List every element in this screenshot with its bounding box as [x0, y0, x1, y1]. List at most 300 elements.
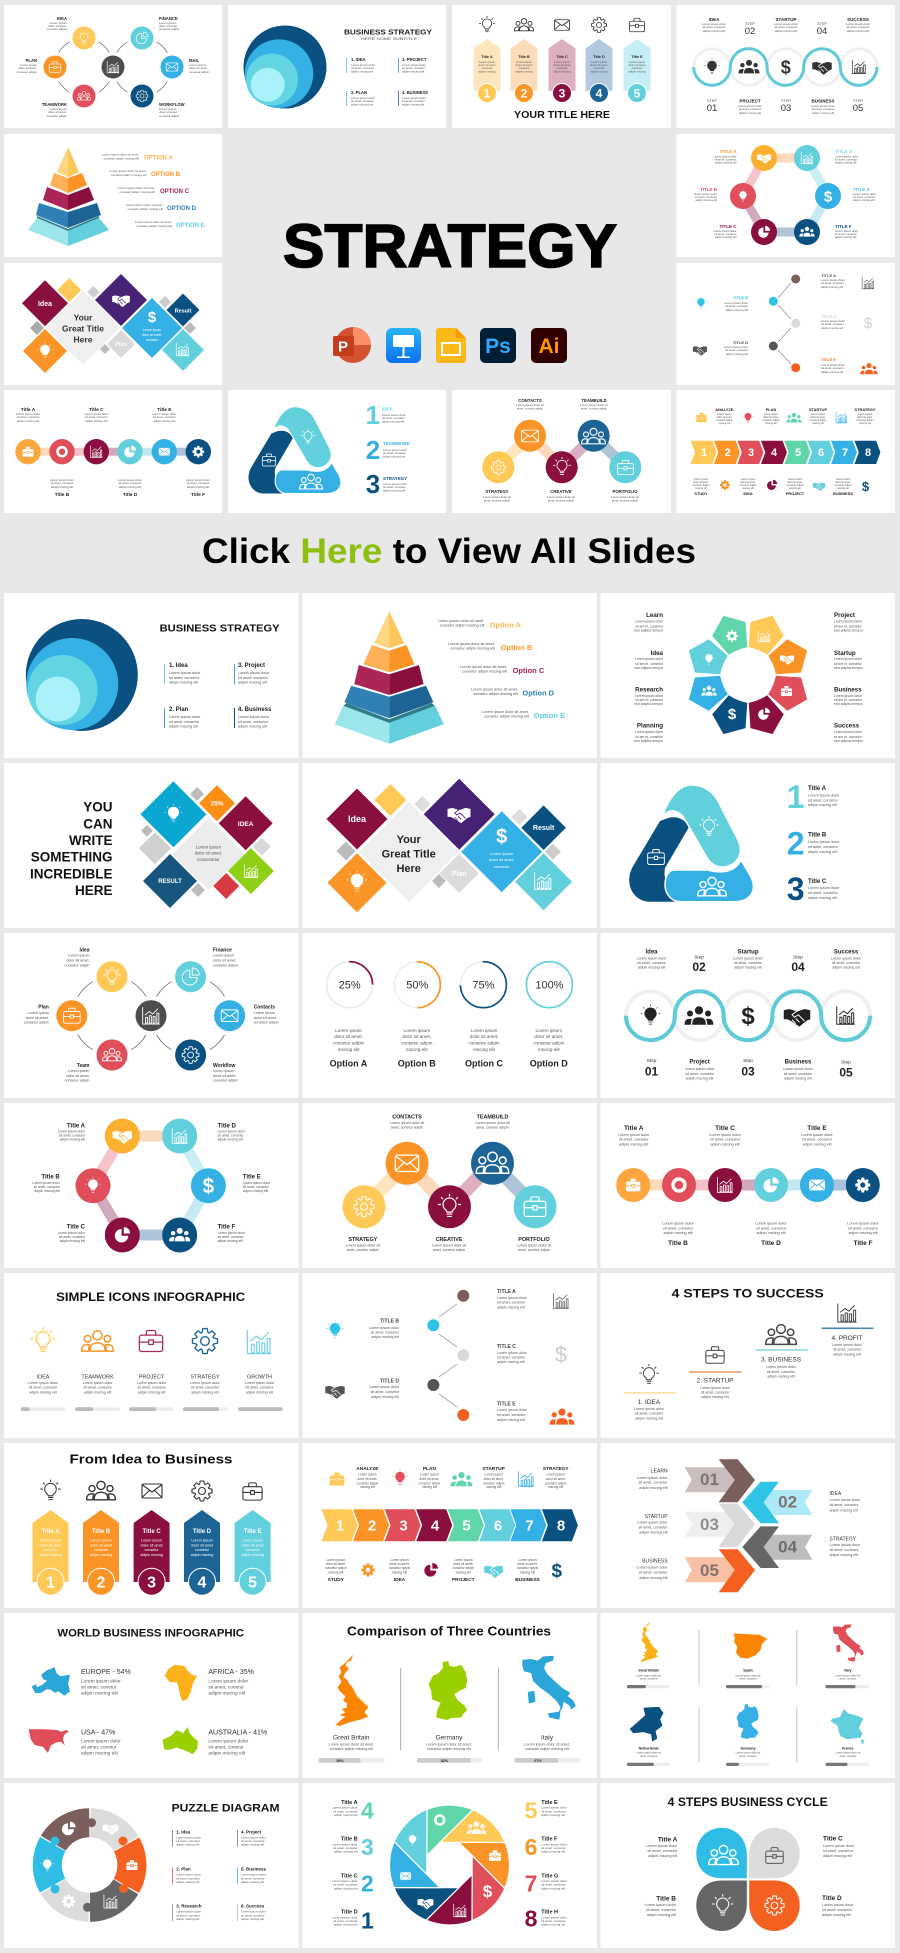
labels	[325, 1466, 569, 1583]
heading: SOMETHING	[31, 850, 112, 865]
list items	[164, 663, 272, 728]
branch labels: Lorem ipsum dolor	[724, 301, 748, 305]
labels: adipin mscing elit	[34, 1189, 60, 1193]
option text: Option B	[398, 1059, 436, 1069]
timeline labels	[16, 407, 210, 498]
diamond text: Plan	[452, 871, 467, 878]
map text: Lorem ipsum dolor	[208, 1678, 249, 1684]
diamond text	[348, 814, 555, 878]
left numbered labels: Lorem ipsum dolor	[332, 1915, 358, 1919]
timeline labels: sit amet, consetur	[153, 415, 176, 419]
panel: pyramid thumbnail	[4, 134, 222, 257]
option labels: OPTION E	[176, 223, 205, 229]
option labels: consetur adipin mscing elit	[111, 173, 147, 177]
right numbered labels: Title F	[541, 1837, 558, 1843]
right labels: adipin mscing elit	[830, 1553, 858, 1557]
arrow labels: dolor sit amet	[554, 63, 571, 67]
top labels: 02	[745, 26, 755, 37]
bottom labels: 03	[781, 103, 791, 114]
heading: 4 STEPS BUSINESS CYCLE	[668, 1797, 828, 1809]
left labels: Planning	[637, 723, 663, 730]
step labels: sit amet, consetur	[767, 1370, 796, 1374]
zigzag labels: PORTFOLIO	[612, 489, 638, 494]
chevron labels: consetur adipin	[810, 419, 827, 422]
labels: dolor sit amet,	[66, 1074, 90, 1078]
top labels: sit amet, consetur	[832, 961, 861, 965]
timeline labels: Lorem ipsum dolor	[152, 412, 176, 416]
arrows with numbers: 1	[484, 86, 491, 100]
arrow labels: dolor sit amet	[479, 63, 496, 67]
panel: puzzle diagram slide	[4, 1783, 298, 1948]
arrow labels: Lorem ipsum	[90, 1539, 112, 1543]
labels: dolor sit amet,	[213, 959, 236, 963]
bottom labels: Lorem ipsum dolor	[685, 1067, 715, 1071]
panel: triangle slide	[600, 763, 895, 928]
maps	[29, 1665, 198, 1754]
labels: adipin mscing elit	[84, 1390, 111, 1394]
branch labels: adipin mscing elit	[726, 308, 748, 312]
top labels: Lorem ipsum dolor	[846, 22, 870, 26]
triangle numbered labels: sit amet, consetur	[383, 485, 406, 489]
labels: Lorem ipsum dolor sit amet,	[426, 1743, 472, 1747]
ring labels: TITLE D	[835, 149, 853, 154]
left numbered labels: 4	[361, 1797, 374, 1823]
labels: Lorem ipsum	[518, 1558, 537, 1562]
arrow labels: dolor sit amet	[629, 63, 646, 67]
step labels: Lorem ipsum dolor	[700, 1386, 731, 1390]
list items: sit amet, consetur	[241, 1839, 265, 1843]
labels: mscing elit	[360, 1485, 375, 1489]
top labels: Startup	[738, 949, 759, 955]
chevron labels: Lorem ipsum	[694, 478, 708, 481]
branch labels: adipin mscing elit	[821, 370, 843, 374]
top labels: 04	[791, 960, 805, 974]
arrow labels: adipin mscing	[140, 1553, 163, 1557]
branch labels: sit amet, consetur	[821, 366, 844, 370]
labels: sit amet, consetur	[243, 1185, 270, 1189]
labels: sit amet, consetur	[191, 1386, 220, 1390]
chevron labels: consetur adipin	[787, 484, 804, 487]
branch labels: Lorem ipsum dolor	[821, 278, 845, 282]
labels: Lorem ipsum dolor	[58, 1231, 86, 1235]
labels: dolor sit amet,	[546, 1477, 566, 1481]
timeline labels: adipin mscing elit	[187, 485, 209, 489]
arrow labels: Title E	[244, 1529, 262, 1535]
branch labels: TITLE C	[821, 314, 836, 319]
line icons row	[31, 1328, 271, 1354]
branch labels: adipin mscing elit	[821, 326, 843, 330]
option labels: consetur adipin mscing elit	[462, 670, 508, 674]
labels: TEAMWORK	[42, 102, 67, 107]
chevron labels: dolor sit amet,	[835, 481, 851, 484]
panel: interlocking chevrons slide	[600, 1443, 895, 1608]
software app icons	[333, 327, 567, 363]
option labels: consetur adipin mscing elit	[104, 156, 139, 160]
labels: consetur adipin	[189, 70, 210, 74]
triangle numbered labels: Lorem ipsum dolor	[383, 448, 407, 452]
labels: amet, conetur adipin	[476, 1125, 509, 1129]
diamond text: Idea	[38, 301, 52, 308]
branch labels: sit amet, consetur	[821, 322, 844, 326]
heading: YOUR TITLE HERE	[514, 110, 610, 121]
labels: sit amet, consetur	[59, 1133, 86, 1137]
arrow labels: consetur	[195, 1548, 210, 1552]
labels: sit amet, consetur	[619, 1138, 649, 1142]
labels	[329, 1734, 570, 1751]
line icons row	[41, 1480, 262, 1501]
top labels: sit amet, consetur	[703, 25, 725, 29]
diamond text: Lorem ipsum	[143, 328, 162, 332]
left labels: Lorem ipsum dolor	[635, 694, 664, 698]
icons: $	[552, 1561, 563, 1582]
left labels: sit amet, consetur	[638, 1570, 668, 1574]
arrow labels: consetur	[519, 66, 529, 70]
zigzag labels: amet, conetur adipin	[484, 498, 510, 502]
labels: IDEA	[37, 1374, 50, 1380]
left labels: adipin mscing elit	[639, 1486, 668, 1490]
numbered labels: 1	[787, 779, 804, 815]
branch labels: TITLE A	[821, 273, 836, 278]
chevron labels: Lorem ipsum	[717, 413, 732, 416]
labels: Lorem ipsum dolor	[646, 1844, 678, 1848]
list items: adipin mscing elit	[351, 70, 373, 74]
step labels: sit amet, consetur	[701, 1391, 730, 1395]
left numbered labels: Lorem ipsum dolor	[332, 1842, 358, 1846]
arrow labels: adipin mscing	[590, 70, 608, 74]
panel: five arrows thumbnail	[452, 5, 671, 128]
labels: sit amet, consetur	[497, 1413, 526, 1417]
labels: Germany	[740, 1746, 756, 1750]
heading: From Idea to Business	[70, 1452, 233, 1466]
chart: numbered chevrons: 2	[368, 1518, 376, 1534]
bottom labels: Business	[785, 1059, 812, 1065]
labels: CREATIVE	[436, 1237, 463, 1243]
percentages: 50%	[406, 980, 429, 992]
arrows with numbers: 2	[521, 86, 528, 100]
labels: amet, consetur	[839, 1754, 857, 1758]
timeline labels: Title B	[55, 492, 70, 498]
chart: aperture wheel	[378, 1793, 521, 1937]
diamond text: consetur	[146, 338, 159, 342]
option text: dolor sit amet,	[470, 1034, 498, 1039]
wheel icons	[400, 1816, 501, 1917]
labels: adipin mscing elit	[497, 1360, 525, 1364]
labels: Plan	[38, 1005, 49, 1011]
labels: TITLE E	[497, 1401, 516, 1407]
labels: TITLE C	[497, 1344, 516, 1350]
chevron labels: mscing elit	[765, 422, 777, 425]
labels: Lorem ipsum dolor	[645, 1903, 677, 1907]
labels: dolor sit amet,	[389, 1562, 410, 1566]
step labels: Lorem ipsum dolor	[634, 1407, 665, 1411]
top labels: STEP	[817, 22, 827, 26]
arrows with numbers	[474, 39, 650, 102]
left labels	[637, 1469, 668, 1580]
labels: mscing elit	[328, 1570, 343, 1574]
branch labels: sit amet, consetur	[725, 348, 748, 352]
labels: Title F	[853, 1240, 873, 1247]
panel: great title diamonds slide	[302, 763, 597, 928]
left labels: LEARN	[651, 1469, 668, 1475]
labels: Lorem ipsum dolor	[755, 1221, 787, 1225]
list items: Lorem ipsum dolor	[402, 63, 426, 67]
branch labels: sit amet, consetur	[725, 304, 748, 308]
branch labels: Lorem ipsum dolor	[821, 319, 845, 323]
chart: wave through rings	[626, 991, 870, 1040]
labels: Title E	[807, 1125, 827, 1132]
chevron icons: $	[862, 479, 870, 494]
labels: sit amet, consetur	[802, 1138, 833, 1142]
left numbered labels: 1	[361, 1907, 374, 1933]
chevron labels: mscing elit	[859, 422, 871, 425]
labels: Lorem ipsum dolor sit	[636, 1751, 661, 1755]
labels: mscing elit	[456, 1570, 471, 1574]
right numbered labels: Title E	[541, 1800, 558, 1806]
heading: INCREDIBLE	[30, 866, 112, 881]
list items: sit amet, consetur	[238, 720, 269, 724]
triangle numbered labels: sit amet, consetur	[382, 416, 405, 420]
labels: Team	[77, 1063, 90, 1069]
zigzag labels: STRATEGY	[485, 489, 509, 494]
list items: Lorem ipsum dolor	[241, 1873, 266, 1877]
labels: Finance	[213, 948, 232, 954]
arrow labels: Lorem ipsum	[591, 60, 608, 64]
chart: progress bars	[627, 1685, 869, 1766]
step labels: adipin mscing elit	[635, 1416, 663, 1420]
option labels: Lorem ipsum dolor sit amet,	[118, 186, 155, 190]
right labels	[834, 612, 864, 743]
chart: branching nodes	[769, 274, 800, 372]
labels: PROJECT	[139, 1374, 165, 1380]
list items: Lorem ipsum dolor	[176, 1873, 201, 1877]
chevron labels: consetur adipin	[857, 419, 874, 422]
bottom labels: sit amet, consetur	[739, 107, 761, 111]
panel: branching nodes thumbnail	[676, 263, 895, 385]
right numbered labels: Lorem ipsum dolor	[541, 1915, 567, 1919]
labels: Lorem ipsum dolor	[243, 1181, 271, 1185]
labels: dolor sit amet,	[189, 66, 208, 70]
left numbered labels: adipin mscing elit	[334, 1850, 358, 1854]
left numbered labels	[332, 1797, 374, 1933]
diamond text: dolor sit amet,	[195, 850, 222, 855]
left numbered labels: sit amet, consetur	[333, 1883, 358, 1887]
chart: wave through rings	[694, 49, 877, 85]
maps	[630, 1622, 864, 1762]
timeline labels: sit amet, consetur	[119, 481, 141, 485]
arrows with numbers	[32, 1510, 271, 1595]
chart: circle timeline	[616, 1168, 880, 1202]
left labels: etur adipisc tempor	[634, 666, 664, 670]
list items: adipin mscing elit	[241, 1917, 264, 1921]
heading: BUSINESS STRATEGY	[344, 27, 432, 36]
chart: pyramid	[335, 611, 444, 744]
labels: Lorem ipsum dolor	[801, 1133, 833, 1137]
labels: consetur adipin mscing elit	[525, 1747, 569, 1751]
chart: ring of circles	[76, 1118, 226, 1252]
labels: adipin mscing elit	[218, 1239, 243, 1243]
labels: IDEA	[57, 16, 67, 21]
list items: Lorem ipsum dolor	[238, 715, 270, 719]
option labels: OPTION B	[151, 172, 181, 178]
option text: dolor sit amet,	[534, 1034, 563, 1039]
labels: dolor sit amet,	[453, 1562, 473, 1566]
triangle numbered labels: adipin mscing elit	[383, 488, 405, 492]
labels: mscing elit	[486, 1485, 501, 1489]
list items: adipin mscing elit	[176, 1917, 199, 1921]
option labels: OPTION A	[144, 156, 173, 162]
list items: sit amet, consetur	[176, 1876, 200, 1880]
branch labels: adipin mscing elit	[726, 352, 748, 356]
list items: 1. IDEA	[351, 57, 366, 62]
timeline labels: adipin mscing elit	[153, 419, 176, 423]
option text: Option C	[465, 1059, 503, 1069]
labels: adipin mscing elit	[191, 1390, 219, 1394]
right numbered labels: sit amet, consetur	[541, 1846, 566, 1850]
top labels: sit amet, consetur	[734, 961, 763, 965]
arrow labels: Lorem ipsum	[242, 1539, 263, 1543]
arrow labels	[478, 55, 646, 74]
map text: Lorem ipsum dolor	[81, 1678, 121, 1684]
panel: three countries slide	[302, 1613, 597, 1778]
left numbered labels: Title C	[341, 1873, 358, 1879]
chart: eight segment gear: $	[728, 706, 737, 723]
left labels: Research	[635, 687, 663, 694]
top labels: 04	[817, 26, 827, 37]
labels: mscing elit	[422, 1485, 437, 1489]
bottom labels: STEP	[707, 99, 717, 103]
labels	[28, 1374, 275, 1394]
labels: consetur adipin	[419, 1481, 440, 1485]
chart: interlocking chevrons	[685, 1459, 812, 1592]
option text: Option D	[530, 1059, 568, 1069]
labels: sit amet, consetur	[371, 1390, 400, 1394]
labels: Lorem ipsum dolor sit	[836, 1751, 861, 1755]
labels: amet, conetur adipin	[347, 1248, 379, 1252]
labels: consetur adipin	[17, 70, 37, 74]
percentages: 25%	[339, 980, 361, 992]
labels: amet, conetur adipin	[518, 1248, 550, 1252]
chevron labels: STARTUP	[809, 407, 827, 412]
chart: looped triangle	[629, 785, 753, 902]
right numbered labels: adipin mscing elit	[541, 1923, 565, 1927]
bottom labels: Project	[689, 1059, 710, 1065]
icon: PowerPoint: P	[338, 338, 348, 356]
labels: Lorem ipsum	[327, 1558, 345, 1562]
bottom labels: Lorem ipsum dolor	[783, 1067, 814, 1071]
option text	[330, 1028, 568, 1069]
left labels: sit amet, consetur	[638, 1525, 668, 1529]
left labels: etur adipisc tempor	[634, 629, 664, 633]
option text: Lorem ipsum	[471, 1028, 497, 1033]
icon: Keynote	[386, 328, 421, 363]
labels: Lorem ipsum	[27, 1011, 49, 1015]
chevron labels: consetur adipin	[740, 484, 757, 487]
top labels: adipin mscing elit	[734, 966, 762, 970]
labels: consetur adipin	[545, 1481, 567, 1485]
labels: consetur adipin mscing elit	[330, 1747, 373, 1751]
option text: mscing elit	[538, 1047, 560, 1052]
left labels: BUSINESS	[642, 1559, 668, 1565]
labels: consetur adipin	[64, 964, 90, 968]
labels: sit amet, consetur	[218, 1133, 245, 1137]
chevron labels: BUSINESS	[833, 491, 853, 496]
arrow labels: consetur	[94, 1548, 109, 1552]
triangle numbered labels: IDEA	[382, 407, 394, 412]
list items: sit amet, consetur	[241, 1913, 265, 1917]
ring labels: Lorem ipsum dolor	[835, 154, 858, 158]
option labels: Lorem ipsum dolor sit amet,	[460, 665, 507, 669]
labels: ANALYZE	[356, 1466, 379, 1472]
arrow labels: Lorem ipsum	[191, 1539, 213, 1543]
branch labels: adipin mscing elit	[821, 285, 843, 289]
chart: zigzag of circles	[342, 1142, 556, 1228]
chevron labels: Lorem ipsum	[788, 478, 802, 481]
labels: Lorem ipsum dolor	[709, 1133, 741, 1137]
triangle numbered labels: Lorem ipsum dolor	[383, 482, 407, 486]
labels: Italy	[844, 1669, 851, 1673]
labels: sit amet, consetur	[34, 1185, 61, 1189]
step labels: 2. STARTUP	[697, 1378, 733, 1385]
list items: adipin mscing elit	[176, 1843, 199, 1847]
chart: numbered chevrons	[322, 1509, 578, 1541]
labels: consetur adipin	[159, 114, 180, 118]
list items: Lorem ipsum dolor	[169, 715, 201, 719]
list items: Lorem ipsum dolor	[351, 96, 375, 100]
top labels: adipin mscing elit	[847, 29, 869, 33]
list items	[172, 1829, 267, 1921]
right labels: sit am et, consetur	[834, 662, 863, 666]
labels: MAIL	[189, 58, 200, 63]
bottom labels: adipin mscing elit	[739, 111, 761, 115]
percentages	[339, 980, 564, 992]
ring labels: adipin mscing elit	[715, 160, 737, 164]
list items: sit amet, consetur	[402, 99, 425, 103]
chevron labels: mscing elit	[742, 487, 754, 490]
bottom labels: 01	[645, 1065, 658, 1079]
heading: WRITE	[69, 833, 112, 848]
top labels	[637, 949, 862, 974]
top labels: IDEA	[709, 17, 720, 22]
chart: numbered chevrons: 5	[795, 447, 801, 459]
list items: sit amet, consetur	[351, 66, 374, 70]
left numbered labels: adipin mscing elit	[334, 1923, 358, 1927]
left numbered labels: Title D	[341, 1910, 358, 1916]
labels: Lorem ipsum dolor	[218, 1129, 246, 1133]
labels: Lorem ipsum dolor sit	[517, 1244, 551, 1248]
timeline labels: Lorem ipsum dolor	[118, 478, 142, 482]
ring labels: TITLE E	[853, 187, 870, 192]
arrows with numbers: 3	[147, 1574, 156, 1592]
labels: GROWTH	[247, 1374, 272, 1380]
labels: sit amet, consetur	[646, 1908, 677, 1912]
chevron labels: Lorem ipsum	[811, 413, 825, 416]
triangle icons	[648, 816, 726, 896]
chart: diamond mosaic	[22, 274, 204, 373]
arrow labels: Title B	[518, 55, 530, 59]
panel: percentage rings slide	[302, 933, 597, 1098]
chevron labels: mscing elit	[695, 487, 707, 490]
labels: adipin mscing elit	[60, 1239, 85, 1243]
arrows with numbers: 5	[248, 1574, 257, 1592]
option text: dolor sit amet,	[402, 1034, 431, 1039]
labels: Title C	[715, 1125, 735, 1132]
chevron labels: ANALYZE	[715, 407, 734, 412]
labels: amet, consetur	[739, 1677, 757, 1681]
heading: Comparison of Three Countries	[347, 1625, 551, 1639]
arrow labels: Title C	[556, 55, 568, 59]
left numbered labels: Lorem ipsum dolor	[332, 1806, 358, 1810]
heading: HERE	[75, 883, 112, 898]
